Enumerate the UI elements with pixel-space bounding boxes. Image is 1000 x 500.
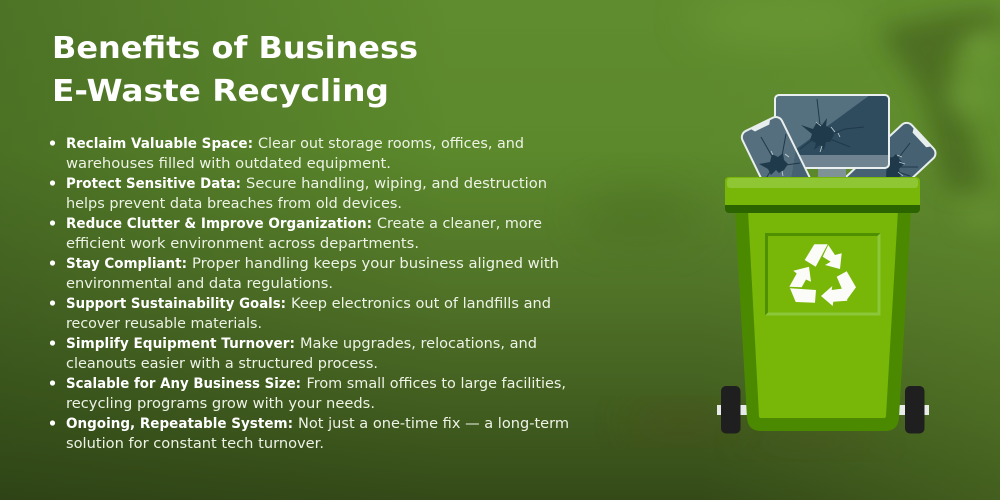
- benefit: stay compliant: Stay Compliant:: [66, 256, 187, 272]
- benefit: protect sensitive data: Protect Sensitive Data:: [66, 176, 241, 192]
- icon: bin body: [735, 210, 911, 431]
- benefit: scalable for any business size: recycling programs grow with your needs.: [66, 396, 375, 412]
- benefit: simplify equipment turnover: cleanouts easier with a structured process.: [66, 356, 378, 372]
- icon: bin lid: [725, 177, 920, 213]
- benefit: support sustainability goals: Keep electronics out of landfills and: [291, 296, 551, 312]
- benefit: support sustainability goals: [50, 296, 551, 332]
- benefit: scalable for any business size: [50, 376, 566, 412]
- benefit: reduce clutter: efficient work environment across departments.: [66, 236, 419, 252]
- benefit: ongoing repeatable system: [50, 416, 569, 452]
- icon: broken phone right: [846, 122, 936, 177]
- icon: bin wheels and axle: [717, 386, 929, 434]
- benefit: support sustainability goals: recover reusable materials.: [66, 316, 262, 332]
- benefit: reclaim valuable space: Reclaim Valuable Space:: [66, 136, 253, 152]
- benefit: scalable for any business size: Scalable for Any Business Size:: [66, 376, 301, 392]
- benefit: ongoing repeatable system: Not just a one-time fix — a long-term: [298, 416, 569, 432]
- icon: broken phone left: [740, 116, 810, 177]
- benefit: reduce clutter: Create a cleaner, more: [377, 216, 542, 232]
- icon: monitor crack: [800, 99, 864, 152]
- benefits list: [50, 136, 569, 452]
- benefit: reduce clutter: Reduce Clutter & Improve Organization:: [66, 216, 372, 232]
- benefit: scalable for any business size: From small offices to large facilities,: [306, 376, 566, 392]
- benefit: ongoing repeatable system: solution for constant tech turnover.: [66, 436, 324, 452]
- benefit: support sustainability goals: Support Sustainability Goals:: [66, 296, 286, 312]
- benefit: stay compliant: Proper handling keeps your business aligned with: [192, 256, 559, 272]
- title: Benefits of Business: [52, 31, 418, 66]
- benefit: protect sensitive data: helps prevent data breaches from old devices.: [66, 196, 402, 212]
- benefit: protect sensitive data: [50, 176, 547, 212]
- benefit: simplify equipment turnover: Simplify Equipment Turnover:: [66, 336, 295, 352]
- benefit: simplify equipment turnover: [50, 336, 537, 372]
- benefit: reclaim valuable space: [50, 136, 524, 172]
- benefit: stay compliant: environmental and data regulations.: [66, 276, 333, 292]
- benefit: simplify equipment turnover: Make upgrades, relocations, and: [300, 336, 537, 352]
- benefit: ongoing repeatable system: Ongoing, Repeatable System:: [66, 416, 293, 432]
- title: E-Waste Recycling: [52, 74, 389, 109]
- benefit: stay compliant: [50, 256, 559, 292]
- title: [52, 31, 418, 109]
- benefit: reclaim valuable space: Clear out storage rooms, offices, and: [258, 136, 524, 152]
- icon: broken monitor: [775, 95, 889, 178]
- benefit: protect sensitive data: Secure handling, wiping, and destruction: [246, 176, 547, 192]
- illustration: recycling bin with broken devices: [717, 95, 938, 434]
- icon: recycling symbol: [789, 244, 856, 306]
- benefit: reduce clutter: [50, 216, 542, 252]
- bin label panel: [765, 233, 880, 316]
- benefit: reclaim valuable space: warehouses filled with outdated equipment.: [66, 156, 391, 172]
